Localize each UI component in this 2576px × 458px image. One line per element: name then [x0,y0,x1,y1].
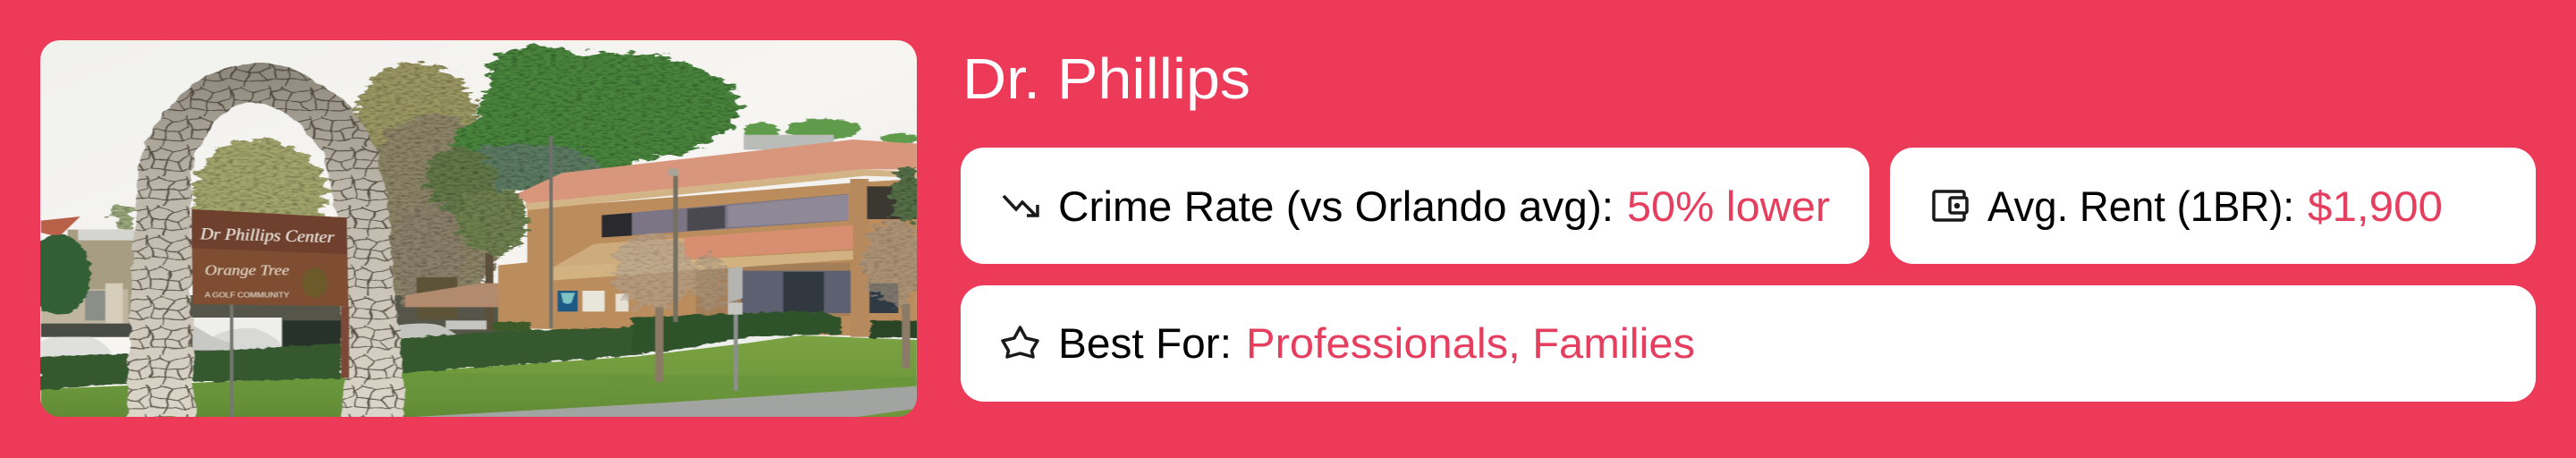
text: average rent: Avg. Rent (1BR): [1987,182,2294,230]
backdrop behind hedges [189,295,516,354]
wooden sign: Orange Tree [205,262,290,278]
palm at right edge [892,165,925,222]
building signs [557,291,629,311]
left building [41,216,134,337]
lower awning [554,225,853,280]
hedges [38,311,920,390]
left tree [40,234,93,315]
icon: trending down [1004,196,1038,216]
distant red roof [405,284,498,307]
roof units [743,135,834,149]
text: best for: Best For: [1058,319,1232,367]
stone arch [127,64,405,418]
photo: Dr. Phillips Center entrance sign [27,38,939,420]
light poles and road sign [230,136,742,418]
roof: upper [515,140,917,210]
wooden sign [191,209,349,377]
lawn and road [41,335,917,418]
palm trunks [417,277,457,319]
tree: tan oak [356,63,507,310]
card: best for [961,285,2536,402]
text: crime rate: Crime Rate (vs Orlando avg): [1058,182,1614,230]
title: Dr. Phillips [962,47,1250,111]
text: average rent: $1,900 [2308,182,2443,230]
wooden sign: Dr Phillips Center [199,225,335,247]
wooden sign: A GOLF COMMUNITY [205,291,290,300]
palm in front of building [456,188,529,253]
card: average rent [1890,148,2536,264]
palms [419,143,603,221]
icon: star [1003,327,1038,357]
tree: large green [452,47,740,185]
sky [27,38,939,420]
tree behind arch [104,137,333,230]
bare trees [610,219,924,382]
distant trees right [743,119,919,144]
text: crime rate: 50% lower [1627,182,1830,230]
text: best for: Professionals, Families [1246,319,1695,367]
parked cars [41,318,487,356]
lower windows [741,271,898,313]
building walls [498,179,917,337]
upper windows [602,194,849,237]
icon: wallet [1934,191,1967,220]
card: crime rate [961,148,1869,264]
